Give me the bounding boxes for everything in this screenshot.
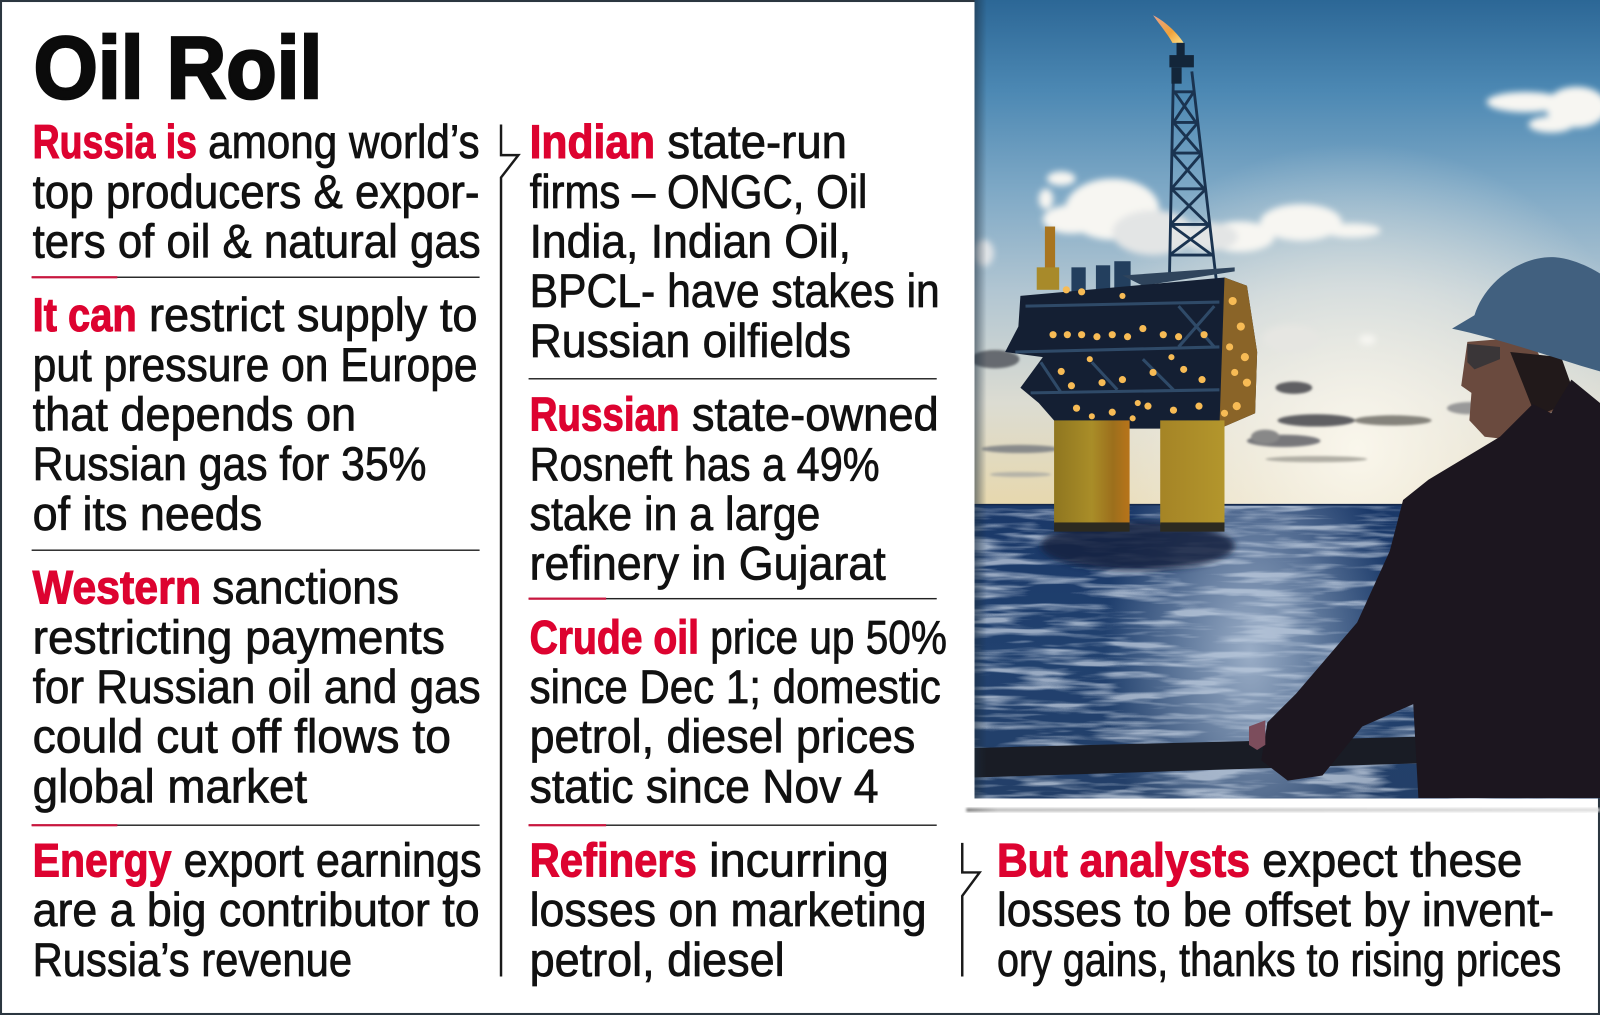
block: It can: of its needs [33, 488, 262, 540]
block: Russian: Russian [530, 389, 680, 441]
block: Indian [530, 116, 940, 367]
gas flare [1153, 15, 1184, 43]
block: Russia is: Russia is [33, 116, 197, 168]
callout bracket: left to middle column [501, 124, 518, 977]
oil rig [1005, 15, 1257, 532]
sunglasses [1467, 344, 1500, 369]
sky [974, 0, 1600, 504]
dark evening clouds [970, 350, 1492, 477]
exhaust stack [1037, 227, 1059, 290]
block: It can: Russian gas for 35% [33, 438, 427, 490]
photo drop shadow [966, 808, 1600, 812]
block: Western: global market [33, 760, 307, 812]
block: It can: restrict supply to [149, 289, 478, 341]
panel: analysts note: But analysts [997, 835, 1250, 887]
block: Crude oil: price up 50% [710, 611, 947, 663]
panel: analysts note: expect these [1262, 835, 1522, 887]
block: It can: that depends on [33, 389, 356, 441]
block: Crude oil: since Dec 1; domestic [530, 661, 941, 713]
safety rail [974, 737, 1418, 778]
block: Refiners: petrol, diesel [530, 934, 785, 986]
block: Crude oil: static since Nov 4 [530, 760, 879, 812]
deck lights [1049, 286, 1251, 421]
divider [32, 276, 480, 278]
deck girders [1015, 302, 1219, 393]
block: Western: restricting payments [33, 611, 445, 663]
platform reflection [1041, 521, 1235, 570]
block: Russian: state-owned [692, 389, 939, 441]
block: Russian [530, 389, 939, 590]
block: Energy: Russia’s revenue [33, 934, 352, 986]
block: Western: could cut off flows to [33, 711, 451, 763]
block: Refiners: Refiners [530, 835, 697, 887]
hair and ear [1510, 352, 1570, 412]
worker [1249, 257, 1600, 798]
block: Indian: BPCL- have stakes in [530, 265, 940, 317]
block: Crude oil: Crude oil [530, 611, 699, 663]
right column leg [1160, 420, 1224, 524]
panel: analysts note: losses to be offset by invent- [997, 884, 1554, 936]
block: Western: sanctions [212, 562, 399, 614]
callout bracket: middle to right block [962, 843, 980, 977]
jacket [1261, 380, 1600, 798]
hard hat [1452, 257, 1600, 371]
block: Refiners [530, 835, 927, 986]
block: Energy: Energy [33, 835, 171, 887]
block: Russian: stake in a large [530, 488, 820, 540]
topside equipment [1071, 261, 1235, 292]
block: Western: for Russian oil and gas [33, 661, 481, 713]
block: Indian: Russian oilfields [530, 315, 851, 367]
panel: left column [32, 116, 482, 986]
left photo vignette [974, 0, 987, 799]
block: Indian: India, Indian Oil, [530, 216, 851, 268]
block: Russian: refinery in Gujarat [530, 538, 886, 590]
block: It can: It can [33, 289, 137, 341]
block: Russia is [33, 116, 481, 268]
panel: analysts note [997, 835, 1561, 986]
block: Energy [33, 835, 482, 986]
divider [32, 824, 480, 826]
hand [1249, 720, 1265, 750]
panel: middle column [529, 116, 947, 986]
block: Crude oil: petrol, diesel prices [530, 711, 915, 763]
block: Refiners: losses on marketing [530, 884, 927, 936]
block: Indian: Indian [530, 116, 655, 168]
right lit side of deck [1219, 278, 1257, 429]
sea [974, 504, 1600, 799]
block: Energy: are a big contributor to [33, 884, 480, 936]
block: Indian: state-run [667, 116, 847, 168]
face and neck [1461, 340, 1554, 438]
flare stack and crown [1169, 43, 1194, 84]
block: Refiners: incurring [709, 835, 889, 887]
divider [32, 549, 480, 551]
block: Western: Western [33, 562, 201, 614]
block: Russia is: among world’s [208, 116, 480, 168]
block: Energy: export earnings [184, 835, 482, 887]
left column leg [1054, 420, 1130, 524]
divider [529, 378, 937, 379]
clouds [973, 87, 1600, 352]
leg bases [1054, 522, 1224, 532]
derrick tower [1169, 71, 1216, 281]
block: It can [33, 289, 478, 540]
block: Western [33, 562, 481, 812]
divider [529, 824, 937, 826]
divider [529, 598, 937, 600]
deck structure [1005, 278, 1257, 429]
block: Russia is: top producers & expor- [33, 166, 480, 218]
block: Russian: Rosneft has a 49% [530, 438, 880, 490]
heading: Oil Roil [34, 19, 322, 117]
block: It can: put pressure on Europe [33, 339, 478, 391]
block: Indian: firms – ONGC, Oil [530, 166, 867, 218]
block: Russia is: ters of oil & natural gas [33, 216, 481, 268]
block: Crude oil [530, 611, 947, 812]
photo: offshore oil rig with worker [970, 0, 1600, 799]
